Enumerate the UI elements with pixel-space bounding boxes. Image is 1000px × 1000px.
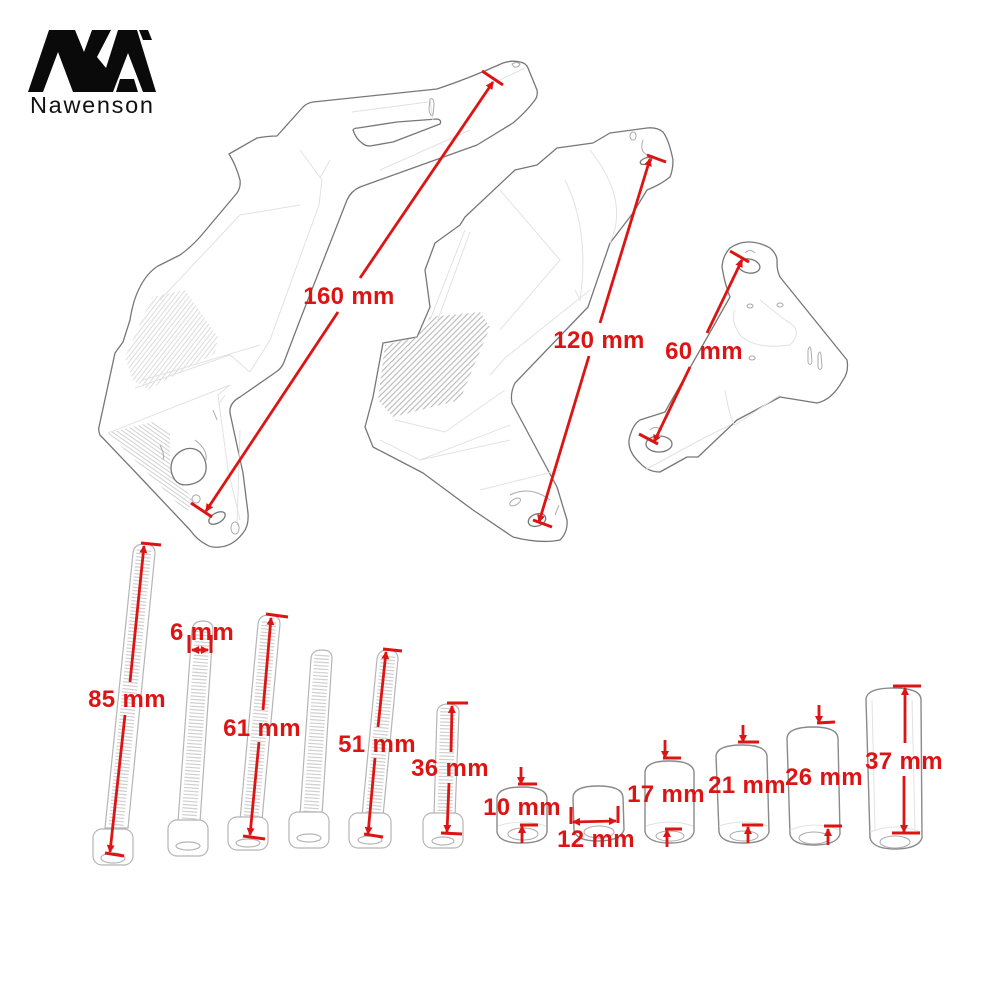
bolt: 6 mm diameter (168, 619, 234, 856)
bolt: 61 mm (223, 614, 301, 850)
dimension: 17 mm: 17 mm (627, 781, 705, 808)
dimension: 85 mm (88, 543, 166, 856)
spacer: 21 mm (708, 725, 786, 843)
dimension: 120 mm: 120 mm (553, 327, 645, 354)
top hole (639, 156, 653, 166)
logo: Nawenson (28, 30, 156, 118)
dimension: 26 mm: 26 mm (785, 764, 863, 791)
dimension: 61 mm (223, 614, 301, 839)
spacer: 10 mm (483, 767, 561, 843)
brand name: Nawenson (30, 92, 155, 118)
spacer: 17 mm (627, 740, 705, 847)
bolt: 85 mm (88, 543, 166, 865)
bolt: 51 mm (338, 649, 416, 848)
bracket outline (629, 242, 848, 472)
surface detail lines (645, 300, 796, 470)
slot cutout (353, 119, 441, 146)
mounting hole (207, 509, 227, 527)
bottom hole (646, 436, 672, 452)
surface detail lines (108, 68, 525, 525)
spacer: 12 mm diameter (557, 786, 635, 853)
panel: left bracket 160 mm (99, 61, 537, 547)
bracket outline (365, 128, 673, 541)
dimension: 160 mm: 160 mm (303, 283, 395, 310)
dimension: 120 mm (533, 155, 666, 527)
bolt: 36 mm (411, 703, 489, 848)
dimension: 37 mm: 37 mm (865, 748, 943, 775)
dimension: 160 mm (191, 71, 503, 517)
dimension: 36 mm: 36 mm (411, 755, 489, 782)
hatched area (378, 312, 490, 417)
top hole (737, 257, 761, 275)
dimension: 12 mm: 12 mm (557, 826, 635, 853)
spacer: 37 mm (865, 686, 943, 849)
surface hatching (125, 290, 218, 390)
bottom hole (526, 511, 548, 529)
dimension: 36 mm (411, 703, 489, 834)
dimension: 60 mm (639, 251, 749, 444)
dimension: 51 mm: 51 mm (338, 731, 416, 758)
bolt: unlabelled (289, 650, 332, 848)
surface detail lines (380, 150, 617, 490)
panel: right bracket 60 mm (629, 242, 848, 472)
large hole (171, 448, 206, 485)
dimension: 10 mm: 10 mm (483, 794, 561, 821)
dimension: 60 mm: 60 mm (665, 338, 743, 365)
dimension: 21 mm: 21 mm (708, 772, 786, 799)
bracket outline (99, 61, 537, 547)
panel: middle bracket 120 mm (365, 128, 673, 541)
dimension: 61 mm: 61 mm (223, 715, 301, 742)
spacer: 26 mm (785, 705, 863, 845)
logo mark (28, 30, 156, 92)
dimension: 51 mm (338, 649, 416, 837)
dimension: 6 mm: 6 mm (170, 619, 234, 646)
dimension: 85 mm: 85 mm (88, 686, 166, 713)
